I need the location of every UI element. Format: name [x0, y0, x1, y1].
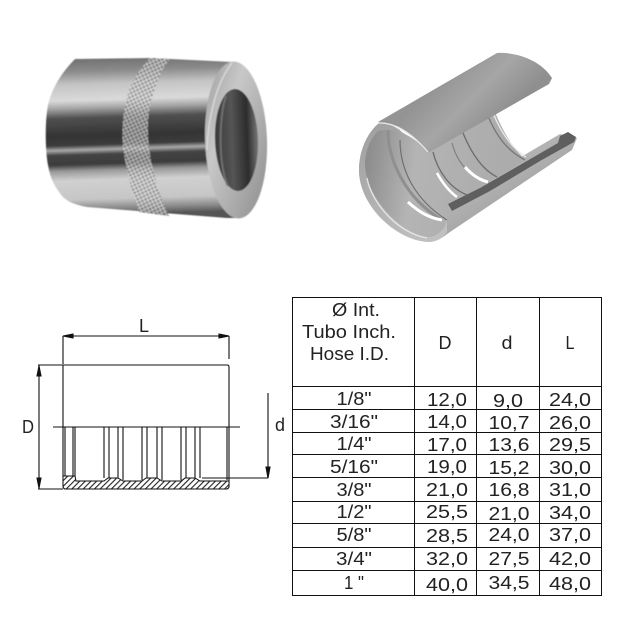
row 3/4: 3/4" [336, 549, 372, 569]
row 5/8: 28,5 [426, 526, 468, 546]
hatched wall section [63, 476, 229, 489]
row 5/16: 5/16" [330, 457, 378, 477]
row 1/2 [336, 502, 591, 524]
row 3/8: 16,8 [488, 480, 530, 500]
internal grooves [388, 113, 526, 220]
bore [213, 88, 260, 192]
label D: D [22, 417, 34, 437]
chamfer highlight [207, 63, 232, 150]
front rim [359, 120, 447, 242]
row 1: 40,0 [426, 575, 468, 595]
table header: Ø Int. [332, 300, 380, 320]
row 1/2: 34,0 [549, 503, 591, 523]
table header [302, 300, 574, 364]
row 3/8: 31,0 [549, 480, 591, 500]
row 1/8: 9,0 [493, 391, 523, 411]
table header: D [438, 333, 452, 353]
row 5/8: 24,0 [488, 525, 530, 545]
row 1/2: 21,0 [488, 504, 530, 524]
table header: d [502, 333, 512, 353]
row 3/8: 3/8" [336, 480, 372, 500]
groove lines [65, 427, 227, 480]
row 3/16: 14,0 [427, 412, 467, 432]
upper shell [378, 53, 552, 153]
table header: L [566, 333, 574, 353]
row 3/8: 21,0 [426, 480, 468, 500]
technical drawing [37, 334, 270, 489]
row 1/8: 12,0 [427, 390, 467, 410]
row 1: 1 " [344, 573, 364, 593]
dimension L [63, 334, 229, 364]
row 1/2: 1/2" [336, 502, 372, 522]
row 5/16 [330, 457, 591, 478]
row 1/4: 1/4" [336, 434, 372, 454]
row 3/4: 42,0 [549, 549, 591, 569]
dimension D [37, 365, 63, 489]
sleeve body [46, 58, 236, 218]
table grid [292, 297, 602, 596]
row 3/16: 10,7 [488, 413, 530, 433]
interior [365, 112, 526, 237]
row 3/16 [330, 412, 591, 433]
label L: L [139, 316, 149, 336]
row 1/4: 17,0 [427, 435, 467, 455]
end face [202, 60, 270, 220]
rim highlight [367, 178, 427, 238]
row 5/16: 15,2 [488, 458, 530, 478]
row 5/16: 19,0 [427, 457, 467, 477]
row 1/8: 1/8" [336, 389, 372, 409]
photo: cutaway ferrule [359, 53, 577, 242]
centre line [53, 426, 240, 428]
sleeve outline [63, 365, 229, 489]
dimension d [202, 393, 270, 478]
row 5/8 [336, 525, 591, 546]
row 3/8 [336, 480, 591, 500]
knurled band [122, 58, 170, 216]
row 1 [344, 573, 591, 595]
row 1/4: 13,6 [488, 435, 530, 455]
upper rim highlight [378, 123, 428, 152]
lower cut edge [448, 132, 576, 211]
row 5/8: 5/8" [336, 525, 372, 545]
photo: knurled ferrule sleeve [46, 58, 270, 220]
row 1/8 [336, 389, 591, 411]
row 3/16: 26,0 [549, 413, 591, 433]
row 1: 48,0 [549, 574, 591, 594]
row 3/4: 32,0 [426, 549, 468, 569]
outer silhouette with lower shell [359, 120, 577, 242]
table header: Hose I.D. [310, 344, 389, 364]
label d: d [275, 415, 285, 435]
row 1/8: 24,0 [549, 390, 591, 410]
row 1/4: 29,5 [549, 435, 591, 455]
table header: Tubo Inch. [302, 322, 396, 342]
row 5/16: 30,0 [549, 458, 591, 478]
row 1: 34,5 [488, 573, 530, 593]
row 1/4 [336, 434, 591, 455]
bore inner step [221, 96, 228, 186]
row 5/8: 37,0 [549, 525, 591, 545]
row 3/4: 27,5 [488, 549, 530, 569]
row 3/4 [336, 549, 591, 569]
dimensions table [292, 297, 602, 596]
row 1/2: 25,5 [426, 502, 468, 522]
row 3/16: 3/16" [330, 412, 378, 432]
